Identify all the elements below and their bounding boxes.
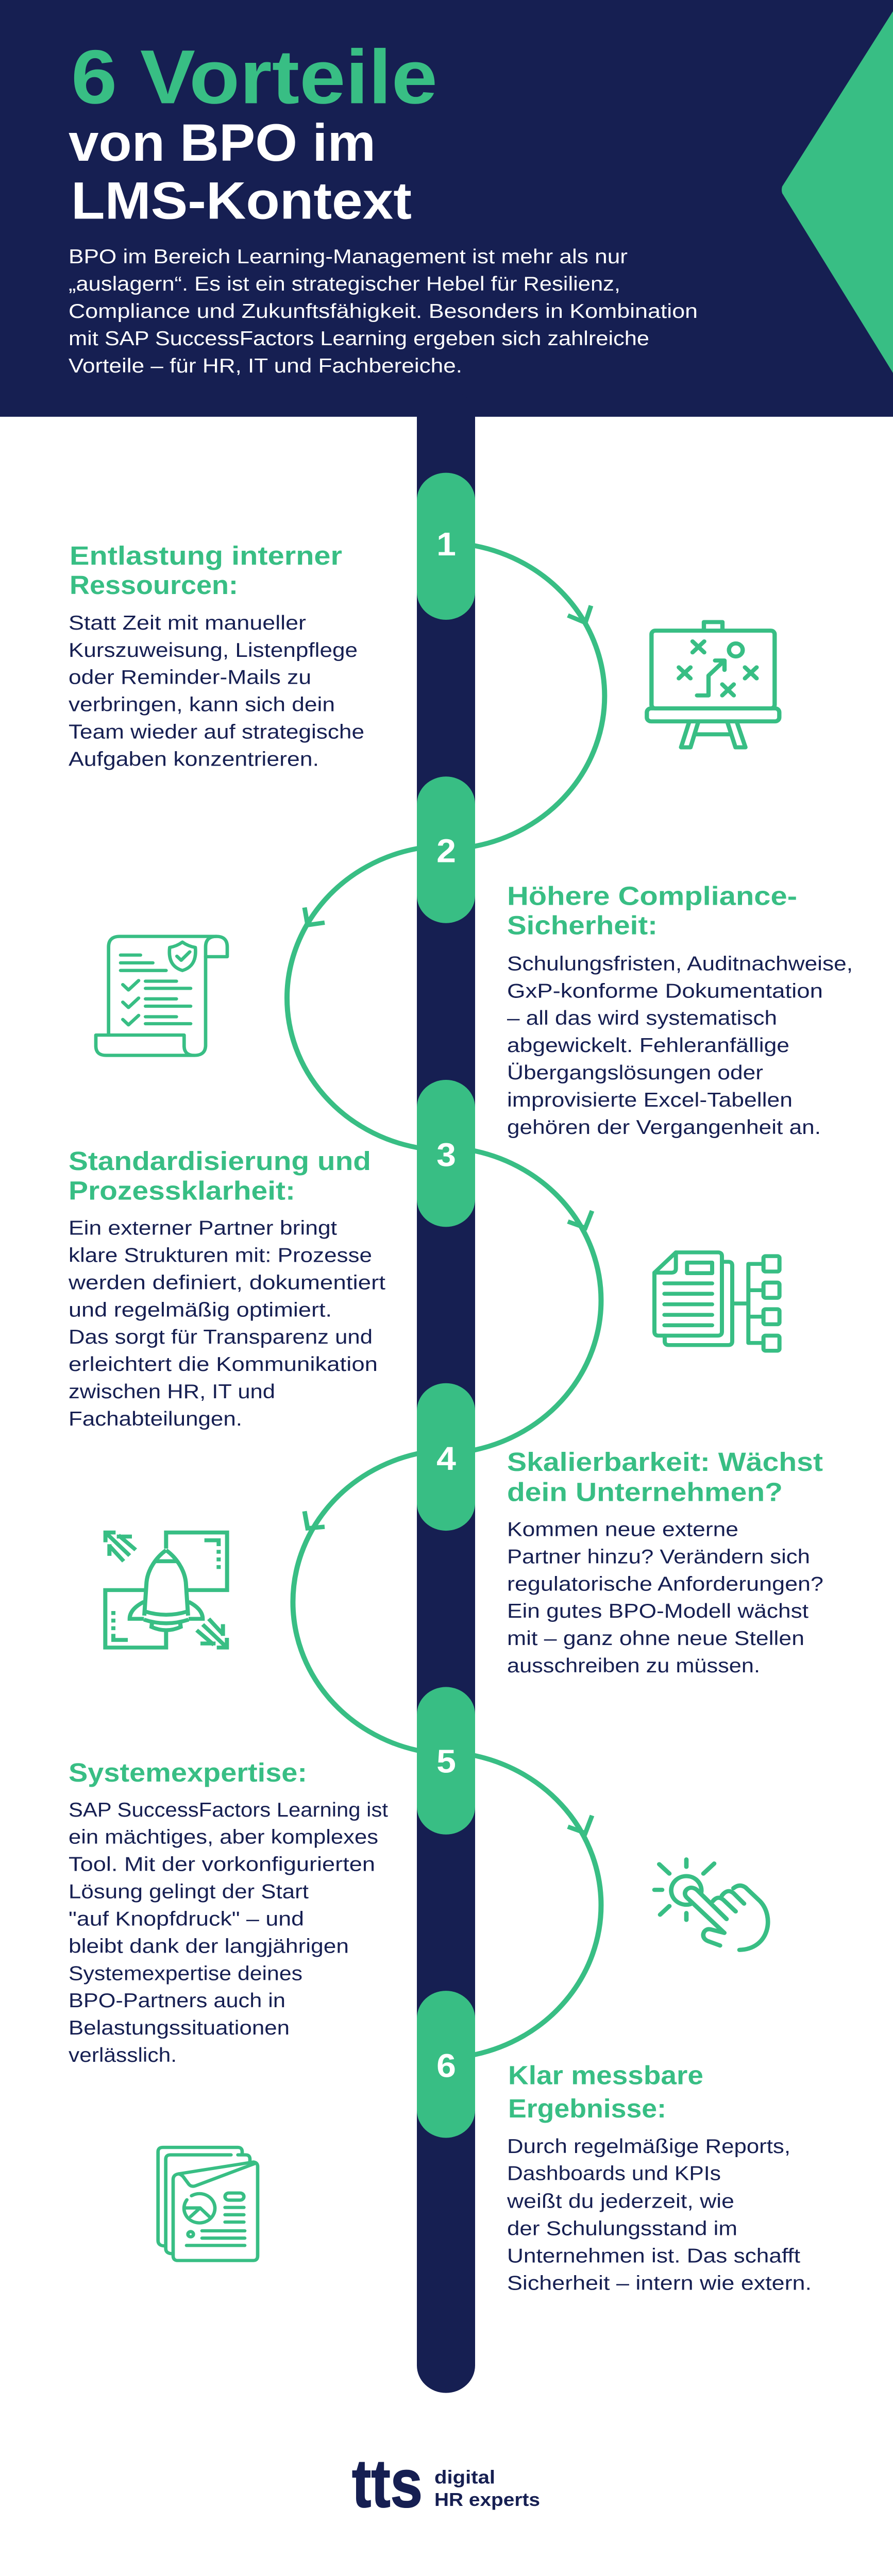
heading: Höhere Compliance- (507, 882, 797, 911)
step marker 1: 1 (436, 526, 456, 563)
heading: Prozessklarheit: (69, 1176, 295, 1206)
heading: Sicherheit: (507, 911, 658, 940)
body text: gehören der Vergangenheit an. (507, 1116, 821, 1139)
body text: weißt du jederzeit, wie (507, 2191, 734, 2212)
heading: Entlastung interner (70, 541, 342, 571)
heading (507, 1447, 823, 1507)
body text: Kommen neue externe (507, 1518, 738, 1540)
arrow: step 3 to 4 (475, 1151, 601, 1450)
body text: Fachabteilungen. (69, 1408, 242, 1430)
heading: Standardisierung und (69, 1146, 371, 1176)
body text: Unternehmen ist. Das schafft (507, 2245, 800, 2267)
body text (69, 612, 364, 770)
body text: Ein externer Partner bringt (69, 1217, 337, 1239)
body text: BPO-Partners auch in (69, 1990, 285, 2012)
body text: regulatorische Anforderungen? (507, 1573, 823, 1595)
body text: – all das wird systematisch (507, 1007, 777, 1029)
body text: Statt Zeit mit manueller (69, 612, 306, 634)
title (69, 35, 437, 230)
body text: Partner hinzu? Verändern sich (507, 1546, 810, 1568)
intro paragraph (69, 246, 698, 377)
step marker 2 (417, 776, 475, 923)
step marker 2: 2 (436, 833, 456, 870)
body text: Dashboards und KPIs (507, 2163, 721, 2184)
body text: verlässlich. (69, 2044, 177, 2066)
body text: Team wieder auf strategische (69, 721, 364, 743)
heading: Systemexpertise: (69, 1758, 307, 1787)
body text: klare Strukturen mit: Prozesse (69, 1244, 372, 1266)
body text: abgewickelt. Fehleranfällige (507, 1035, 789, 1057)
step marker 4 (417, 1383, 475, 1531)
body text: bleibt dank der langjährigen (69, 1935, 349, 1957)
intro paragraph: mit SAP SuccessFactors Learning ergeben sich zahlreiche (69, 328, 649, 350)
body text: Aufgaben konzentrieren. (69, 748, 319, 770)
body text: Belastungssituationen (69, 2017, 290, 2039)
heading (70, 541, 342, 600)
heading: Klar messbare (508, 2061, 703, 2090)
body text: Sicherheit – intern wie extern. (507, 2272, 812, 2294)
step marker 1 (417, 473, 475, 620)
intro paragraph: „auslagern“. Es ist ein strategischer Hebel für Resilienz, (69, 273, 620, 295)
arrow: step 4 to 5 (293, 1454, 417, 1750)
body text (507, 953, 853, 1139)
body text: erleichtert die Kommunikation (69, 1353, 378, 1376)
step marker 5 (417, 1687, 475, 1835)
step marker 4: 4 (436, 1440, 456, 1478)
body text: Schulungsfristen, Auditnachweise, (507, 953, 853, 975)
arrow: step 5 to 6 (475, 1756, 601, 2055)
timeline bar (417, 389, 475, 2393)
body text: und regelmäßig optimiert. (69, 1299, 332, 1321)
heading: Ergebnisse: (508, 2094, 666, 2123)
panel: benefit 2 (507, 882, 853, 1139)
icon: finger pressing button (654, 1859, 768, 1950)
heading: Ressourcen: (70, 570, 238, 600)
body text (507, 1518, 823, 1677)
panel: benefit 3 (68, 1146, 385, 1430)
heading (507, 882, 797, 940)
title: von BPO im (69, 114, 376, 172)
body text: Systemexpertise deines (69, 1962, 302, 1985)
body text: zwischen HR, IT und (69, 1381, 275, 1403)
body text: werden definiert, dokumentiert (68, 1272, 385, 1294)
panel: header (0, 0, 893, 417)
heading: dein Unternehmen? (507, 1478, 783, 1507)
intro paragraph: BPO im Bereich Learning-Management ist mehr als nur (69, 246, 628, 268)
panel: benefit 4 (507, 1447, 823, 1677)
step marker 3: 3 (436, 1137, 456, 1174)
body text: mit – ganz ohne neue Stellen (507, 1628, 804, 1650)
title: LMS-Kontext (71, 172, 412, 230)
logo: tts digital HR experts (352, 2445, 540, 2521)
body text: verbringen, kann sich dein (69, 694, 335, 716)
body text: oder Reminder-Mails zu (69, 667, 311, 688)
body text: improvisierte Excel-Tabellen (507, 1089, 793, 1111)
logo: tts digital HR experts: HR experts (434, 2489, 540, 2510)
logo: tts digital HR experts: digital (434, 2467, 495, 2487)
icon: documents with structure tree (654, 1252, 780, 1351)
body text: ein mächtiges, aber komplexes (69, 1826, 378, 1848)
body text: Übergangslösungen oder (507, 1062, 763, 1084)
body text (507, 2136, 812, 2294)
step marker 5: 5 (436, 1743, 456, 1780)
body text: "auf Knopfdruck" – und (69, 1908, 304, 1930)
intro paragraph: Vorteile – für HR, IT und Fachbereiche. (69, 355, 462, 377)
body text: Tool. Mit der vorkonfigurierten (69, 1854, 375, 1875)
icon: report pages with pie chart (158, 2147, 258, 2261)
icon: compliance scroll with shield (96, 937, 227, 1055)
panel: benefit 6 (507, 2061, 812, 2294)
panel: benefit 1 (69, 541, 364, 770)
arrow: step 1 to 2 (475, 546, 604, 846)
decorative green triangle (782, 11, 893, 373)
panel: benefit 5 (69, 1758, 388, 2066)
body text (69, 1799, 388, 2066)
arrow: step 2 to 3 (287, 849, 417, 1147)
icon: strategy board (647, 622, 779, 748)
step marker 6 (417, 1991, 475, 2138)
body text (68, 1217, 385, 1430)
logo: tts digital HR experts: tts (352, 2445, 423, 2521)
heading (508, 2061, 703, 2123)
heading (69, 1146, 371, 1206)
heading: Skalierbarkeit: Wächst (507, 1447, 823, 1477)
body text: Das sorgt für Transparenz und (69, 1326, 373, 1348)
intro paragraph: Compliance und Zukunftsfähigkeit. Besonders in Kombination (69, 300, 698, 323)
step marker 6: 6 (436, 2047, 456, 2084)
body text: Lösung gelingt der Start (69, 1881, 309, 1903)
step marker 3 (417, 1080, 475, 1227)
icon: rocket with scaling arrows (105, 1533, 227, 1648)
body text: Ein gutes BPO-Modell wächst (507, 1600, 808, 1622)
body text: SAP SuccessFactors Learning ist (69, 1799, 388, 1821)
body text: Kurszuweisung, Listenpflege (69, 639, 358, 662)
body text: der Schulungsstand im (507, 2218, 737, 2240)
body text: ausschreiben zu müssen. (507, 1655, 760, 1677)
body text: Durch regelmäßige Reports, (507, 2136, 790, 2158)
body text: GxP-konforme Dokumentation (507, 980, 823, 1002)
title: 6 Vorteile (71, 35, 437, 120)
